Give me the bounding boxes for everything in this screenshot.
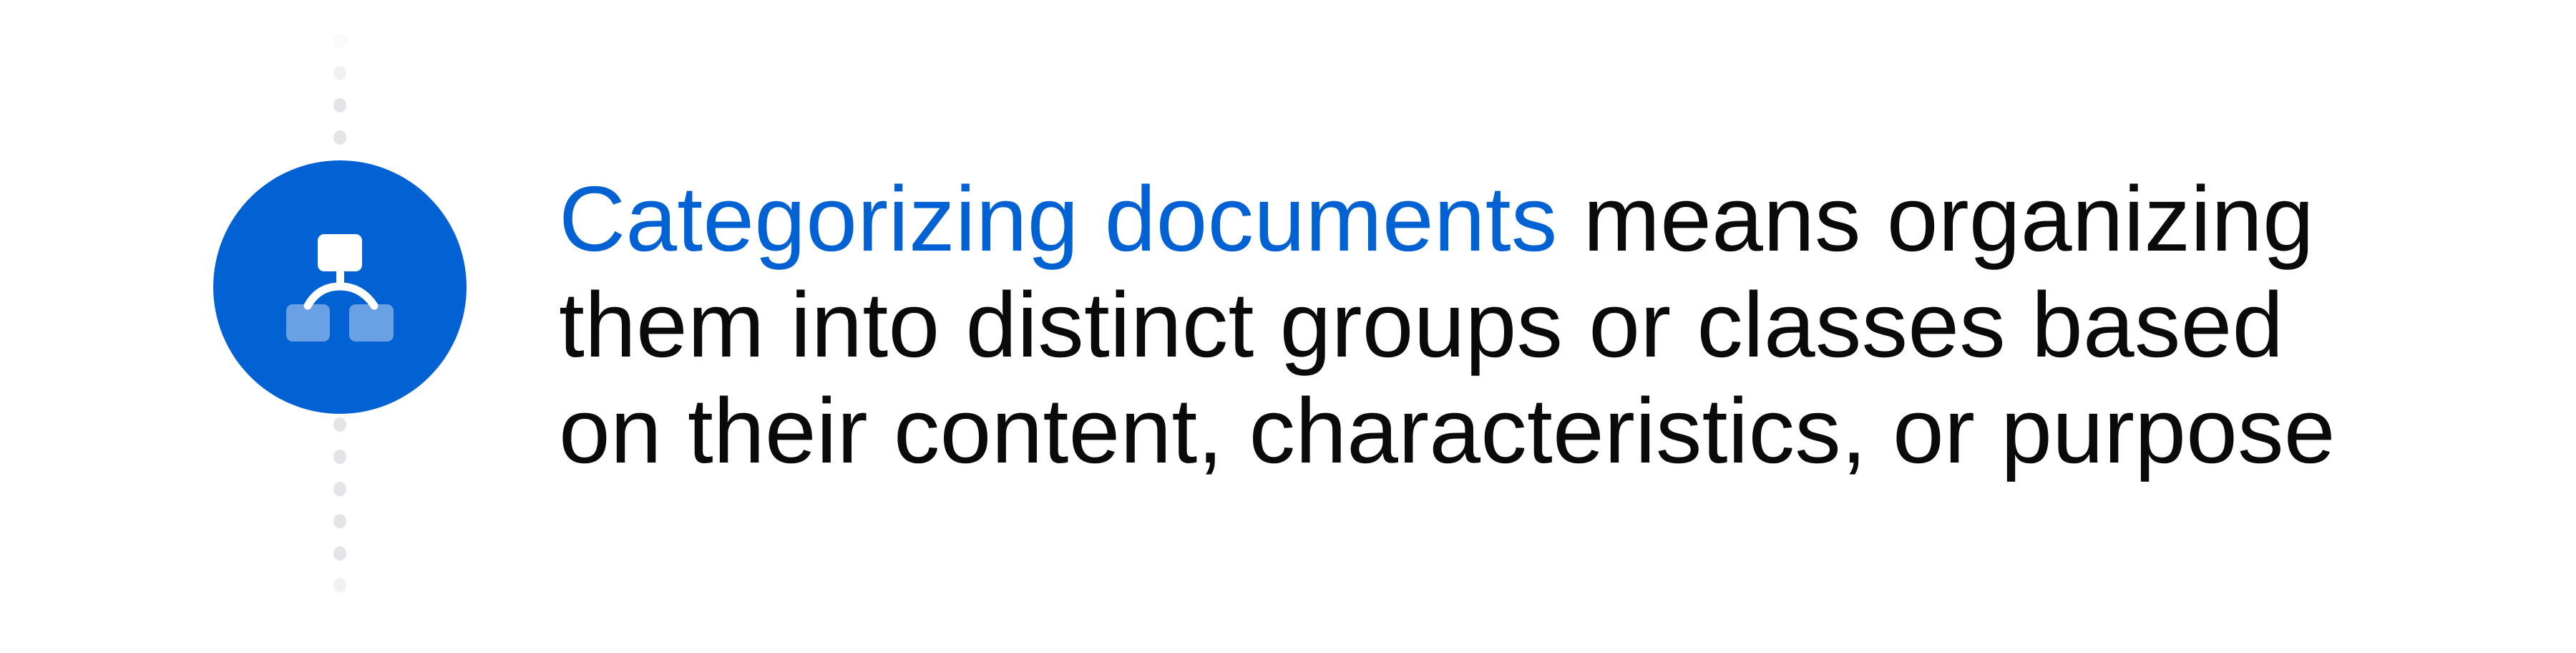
text block: definition: them into distinct groups or classes based (559, 274, 2283, 377)
text block: definition: on their content, characteristics, or purpose (559, 379, 2336, 483)
icon: blue circle with hierarchy (213, 160, 467, 414)
icon: hierarchy (286, 234, 394, 342)
text block: definition: Categorizing documents means organizing (559, 168, 2314, 271)
